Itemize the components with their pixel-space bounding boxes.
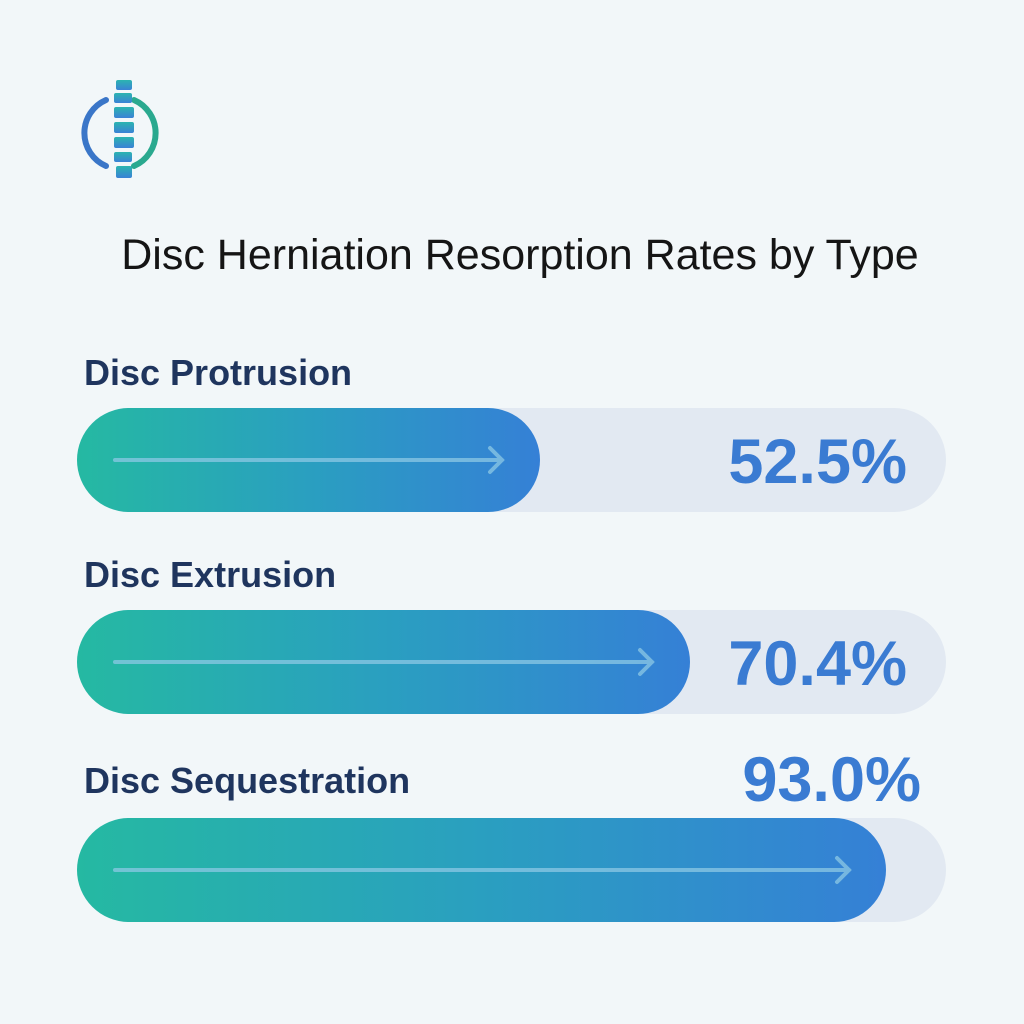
- label: protrusion: Disc Protrusion: [84, 352, 352, 393]
- bar: sequestration: [77, 818, 946, 922]
- icon: spine logo: [81, 80, 159, 178]
- value: 52.5%: [728, 427, 907, 497]
- bar: protrusion: [77, 408, 946, 512]
- label: sequestration: Disc Sequestration: [84, 760, 410, 801]
- title: Disc Herniation Resorption Rates by Type: [121, 231, 919, 279]
- value: 70.4%: [728, 629, 907, 699]
- value: sequestration: 93.0%: [742, 745, 921, 815]
- bar: extrusion: [77, 610, 946, 714]
- label: extrusion: Disc Extrusion: [84, 554, 336, 595]
